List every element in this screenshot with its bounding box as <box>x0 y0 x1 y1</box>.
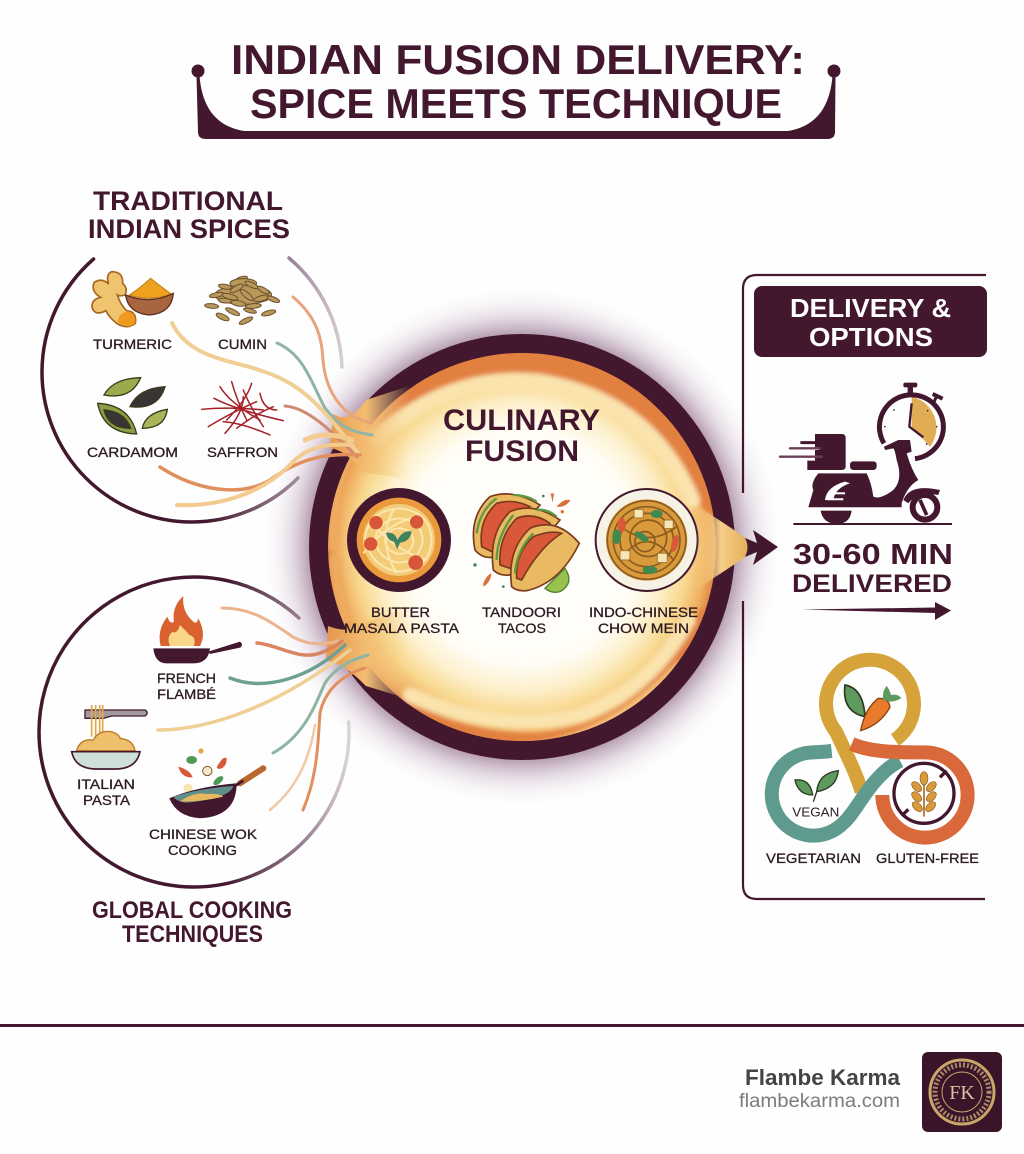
dish labels: TACOS <box>498 620 546 636</box>
delivery time <box>792 539 953 598</box>
icon: cardamom <box>98 378 167 434</box>
dish: tandoori tacos <box>473 493 579 592</box>
loop: teal with vegan <box>772 751 900 836</box>
inner swirl disk <box>328 352 716 754</box>
circular outline <box>39 577 349 887</box>
technique labels: PASTA <box>83 792 131 808</box>
title text: INDIAN FUSION DELIVERY: <box>231 36 805 83</box>
technique labels: ITALIAN <box>77 776 135 792</box>
diet labels <box>766 850 979 866</box>
speed lines <box>780 443 830 457</box>
icon: delivery scooter and stopwatch <box>780 383 952 524</box>
icon: french flambe pan <box>153 596 242 663</box>
delivery time: DELIVERED <box>792 570 952 598</box>
heading: global cooking techniques <box>92 897 292 948</box>
outer glow <box>260 285 784 809</box>
icon: turmeric <box>92 272 173 327</box>
loop: orange with gluten-free <box>852 744 968 838</box>
title text <box>231 36 805 127</box>
technique labels: COOKING <box>168 842 237 858</box>
footer <box>0 1024 1024 1132</box>
technique labels: CHINESE WOK <box>149 826 258 842</box>
technique labels: FRENCH <box>157 670 216 686</box>
technique labels: FLAMBÉ <box>157 686 216 702</box>
icon: three tacos <box>473 493 579 592</box>
panel: global cooking techniques <box>39 577 368 948</box>
icon: chinese wok <box>169 748 263 818</box>
brand text: Flambe Karma <box>745 1065 901 1090</box>
heading: traditional indian spices <box>88 186 290 244</box>
heading box: DELIVERY & <box>790 293 951 323</box>
dish labels: CHOW MEIN <box>598 620 689 636</box>
icon: pasta bowl <box>347 488 451 592</box>
icon: cumin <box>204 275 280 326</box>
title text: SPICE MEETS TECHNIQUE <box>250 80 782 127</box>
brand text: flambekarma.com <box>739 1091 900 1112</box>
scooter <box>807 434 940 524</box>
flow lines into fusion circle <box>158 608 368 810</box>
dish labels: TANDOORI <box>482 604 561 620</box>
technique labels <box>77 670 258 858</box>
heading: global cooking techniques: TECHNIQUES <box>122 921 263 948</box>
spice labels: TURMERIC <box>93 336 172 352</box>
stopwatch <box>879 383 943 459</box>
logo <box>922 1052 1002 1132</box>
spice labels <box>87 336 278 460</box>
heading: traditional indian spices: TRADITIONAL <box>93 186 283 216</box>
loop: gold with carrot <box>826 660 914 792</box>
diet labels: VEGETARIAN <box>766 850 861 866</box>
funnel: upper left inlet <box>330 385 412 480</box>
arrow: delivered <box>802 602 951 620</box>
dish labels: MASALA PASTA <box>344 620 460 636</box>
dish labels <box>344 604 698 636</box>
dish labels: BUTTER <box>371 604 430 620</box>
spout <box>695 505 760 590</box>
heading: culinary fusion: CULINARY <box>443 404 600 437</box>
dish: butter masala pasta <box>347 488 451 592</box>
panel: delivery and options <box>743 275 987 899</box>
dish labels: INDO-CHINESE <box>589 604 698 620</box>
heading box <box>754 286 987 357</box>
icon: italian pasta <box>72 705 147 769</box>
panel border <box>743 275 986 899</box>
diet options triskelion <box>772 660 968 838</box>
dish: indo-chinese chow mein <box>596 489 698 591</box>
dark ring <box>309 334 735 760</box>
flow lines into fusion circle <box>160 297 372 505</box>
diet labels: GLUTEN-FREE <box>876 850 979 866</box>
spice labels: CUMIN <box>218 336 267 352</box>
funnel: lower left inlet <box>326 605 412 700</box>
panel: traditional indian spices <box>42 186 372 522</box>
heading: global cooking techniques: GLOBAL COOKING <box>92 897 292 924</box>
heading: traditional indian spices: INDIAN SPICES <box>88 214 290 244</box>
arrowhead <box>745 530 778 565</box>
title banner <box>192 36 840 139</box>
heading: culinary fusion <box>443 404 600 468</box>
icon: noodle plate <box>596 489 698 591</box>
spice labels: SAFFRON <box>207 444 278 460</box>
central circle: culinary fusion <box>275 300 768 794</box>
logo: FK <box>949 1082 975 1104</box>
arrow: fusion to delivery <box>695 505 778 590</box>
heading box: OPTIONS <box>809 322 933 352</box>
icon: saffron <box>202 382 283 435</box>
banner bracket <box>192 64 840 139</box>
brand text <box>739 1065 901 1112</box>
heading: culinary fusion: FUSION <box>465 435 579 468</box>
ground line <box>793 521 952 527</box>
delivery time: 30-60 MIN <box>793 539 953 571</box>
loop: teal with vegan: VEGAN <box>792 806 839 820</box>
circular outline <box>42 258 342 522</box>
spice labels: CARDAMOM <box>87 444 178 460</box>
